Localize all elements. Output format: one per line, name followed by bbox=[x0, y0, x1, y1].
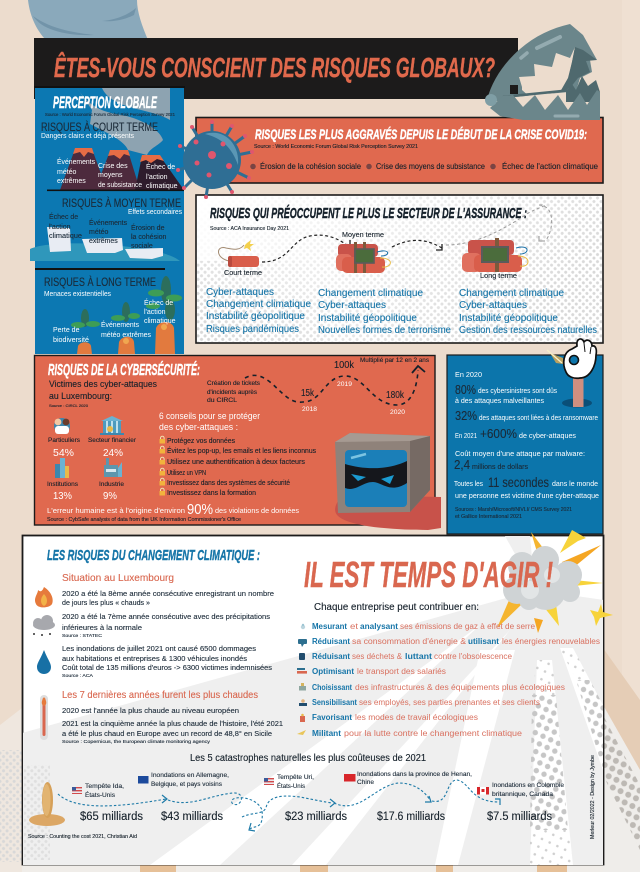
chart labels: 2020 bbox=[390, 410, 406, 416]
chart caption: du CIRCL bbox=[207, 398, 238, 404]
risk: échec action climatique: climatique bbox=[49, 233, 82, 240]
panel: risques de la cybersécurité bbox=[34, 356, 441, 530]
icon: single dynamite bbox=[218, 240, 259, 267]
item: tempête ida: $65 milliards bbox=[80, 811, 143, 823]
list: long terme: Changement climatique bbox=[459, 288, 564, 299]
stat: secteur financier bbox=[88, 437, 137, 459]
stat: secteur financier: Secteur financier bbox=[88, 437, 137, 444]
subheading: 7 dernières années: Les 7 dernières années furent les plus chaudes bbox=[62, 689, 258, 701]
action: réduisant énergie: Réduisant bbox=[312, 637, 350, 646]
icebergs bbox=[30, 227, 180, 261]
tips list: Évitez les pop-up, les emails et les liens inconnus bbox=[167, 446, 316, 455]
bullet list: Érosion de la cohésion sociale bbox=[260, 162, 362, 171]
action: militant: pour la lutte contre le changement climatique bbox=[344, 729, 523, 738]
risk: échec action climatique: Échec de bbox=[49, 212, 78, 221]
heading: en 2020: En 2020 bbox=[455, 370, 482, 379]
item: inondations chine bbox=[344, 771, 472, 823]
action: optimisant bbox=[312, 667, 446, 676]
action: optimisant: Optimisant bbox=[312, 667, 354, 676]
action: militant: Militant bbox=[312, 729, 341, 738]
chart labels: 2019 bbox=[337, 382, 353, 388]
stat: industrie bbox=[99, 481, 124, 502]
stat: industrie: Industrie bbox=[99, 481, 124, 488]
heading: 5 catastrophes: Les 5 catastrophes naturelles les plus coûteuses de 2021 bbox=[190, 753, 426, 764]
stat: +600%: +600% bbox=[480, 426, 517, 441]
icon: virus bbox=[176, 120, 254, 199]
risk: échec action climatique: l'action bbox=[146, 174, 168, 181]
heading: risques du changement climatique: LES RISQUES DU CHANGEMENT CLIMATIQUE : bbox=[47, 547, 260, 564]
icon: industrie bbox=[104, 458, 122, 477]
panel: secteur de l'assurance bbox=[196, 195, 603, 343]
risk: crise des moyens: de subsistance bbox=[98, 182, 142, 189]
list: long terme bbox=[459, 288, 597, 336]
text: année la plus chaude: a été le plus chaud en Europe avec un record de 48,8° en Sicile bbox=[62, 729, 272, 738]
panel: risques aggravés covid bbox=[196, 118, 603, 183]
icon: institutions bbox=[55, 458, 69, 478]
section: moyen terme bbox=[30, 197, 182, 270]
icon: particuliers bbox=[54, 418, 70, 434]
tips list: Investissez dans des systèmes de sécurité bbox=[167, 478, 290, 487]
callout: erreur humaine: L'erreur humaine est à l'origine d'environ bbox=[47, 506, 185, 515]
risk: échec action climatique bbox=[144, 298, 176, 325]
source: Source : CIRCL 2020 bbox=[49, 403, 89, 408]
stat: coût moyen bbox=[454, 451, 585, 472]
label: court terme: Court terme bbox=[224, 268, 262, 277]
text: précipitations: Source : STATEC bbox=[62, 633, 103, 638]
text: inondations: aux habitations et entreprises & 1300 véhicules inondés bbox=[62, 654, 247, 663]
list: moyen terme: Nouvelles formes de terrorisme bbox=[318, 325, 451, 336]
list: long terme: Instabilité géopolitique bbox=[459, 313, 558, 324]
intro text: Chaque entreprise peut contribuer en: bbox=[314, 602, 479, 613]
action: réduisant énergie: utilisant bbox=[468, 637, 499, 646]
tips list: Utilisez une authentification à deux facteurs bbox=[167, 457, 305, 466]
risk: crise des moyens: Crise des bbox=[98, 163, 128, 170]
stat: 11 secondes: dans le monde bbox=[552, 481, 598, 488]
list: long terme: Gestion des ressources naturelles bbox=[459, 325, 597, 336]
tips heading: 6 conseils pour se protéger bbox=[159, 411, 260, 422]
source: Sources : Marsh/Microsoft/NIVLI/ CMS Survey 2021 bbox=[455, 507, 572, 513]
text: inondations: Les inondations de juillet 2021 ont causé 6500 dommages bbox=[62, 644, 256, 653]
risk: érosion cohésion sociale: la cohésion bbox=[131, 234, 167, 241]
illustration: shark tail top left bbox=[28, 0, 148, 40]
action: sensibilisant: Sensibilisant bbox=[312, 698, 357, 707]
source: et Gallice International 2021 bbox=[455, 514, 522, 520]
item: tempête ida bbox=[72, 783, 143, 823]
timeline arrowheads bbox=[162, 795, 500, 831]
bullet list: Crise des moyens de subsistance bbox=[376, 162, 485, 171]
icon: coin on plate bbox=[29, 782, 65, 826]
risk: perte de biodiversité bbox=[53, 327, 89, 344]
item: tempête uri bbox=[264, 774, 347, 823]
text: année la plus chaude: 2020 est l'année la plus chaude au niveau européen bbox=[62, 706, 239, 715]
chart caption: Création de tickets bbox=[207, 381, 260, 387]
item: tempête uri: Tempête Uri, bbox=[277, 774, 314, 781]
label: moyen terme: Moyen terme bbox=[342, 230, 384, 239]
heading: RISQUES À LONG TERME bbox=[44, 276, 156, 289]
stat: 11 secondes bbox=[454, 475, 599, 500]
chart labels: Multiplié par 12 en 2 ans bbox=[360, 358, 429, 364]
risk: échec action climatique: climatique bbox=[144, 318, 176, 325]
stat: institutions: Institutions bbox=[47, 481, 79, 488]
action: réduisant déchets: ses déchets & bbox=[352, 652, 403, 661]
item: tempête uri: États-Unis bbox=[277, 781, 306, 790]
source: Source : ACA Insurance Day 2021 bbox=[210, 226, 289, 232]
text: précipitations: inférieures à la normale bbox=[62, 623, 142, 632]
panel: changement climatique et action bbox=[22, 530, 613, 865]
stat: coût moyen: 2,4 bbox=[454, 458, 470, 472]
list: moyen terme: Changement climatique bbox=[318, 288, 423, 299]
chart caption: d'incidents auprès bbox=[207, 390, 257, 396]
dashed timeline bbox=[58, 780, 499, 829]
item: inondations chine: Chine bbox=[357, 779, 374, 786]
action: réduisant déchets: Réduisant bbox=[312, 652, 350, 661]
section: court terme bbox=[41, 121, 184, 191]
action: mesurant: Mesurant bbox=[312, 622, 347, 631]
text: températures: 2020 a été la 8ème année consécutive enregistrant un nombre bbox=[62, 589, 274, 598]
risk: érosion cohésion sociale: Érosion de bbox=[131, 223, 165, 232]
item: tempête uri: $23 milliards bbox=[285, 811, 347, 823]
risk: perte de biodiversité: Perte de bbox=[53, 327, 80, 334]
risk: échec action climatique: Échec de bbox=[146, 162, 175, 171]
stat: secteur financier: 24% bbox=[103, 447, 123, 459]
text: année la plus chaude bbox=[62, 706, 283, 744]
risk: échec action climatique: Échec de bbox=[144, 298, 173, 307]
subheading: situation au luxembourg: Situation au Luxembourg bbox=[62, 572, 174, 584]
item: tempête ida: Tempête Ida, bbox=[85, 783, 124, 790]
item: inondations canada: Inondations en Colombie bbox=[492, 782, 564, 789]
text: précipitations: 2020 a été la 7ème année consécutive avec des précipitations bbox=[62, 612, 270, 621]
heading: perception globale: PERCEPTION GLOBALE bbox=[53, 93, 157, 112]
chart labels: 100k bbox=[334, 360, 355, 371]
victimes heading: au Luxembourg: bbox=[49, 391, 112, 402]
risk: échec action climatique: climatique bbox=[146, 183, 178, 190]
text: températures bbox=[62, 589, 274, 607]
risk: échec action climatique: l'action bbox=[49, 224, 71, 231]
panel: statistiques cyber 2020 bbox=[22, 339, 613, 865]
chart labels: 15k bbox=[301, 388, 315, 399]
label: long terme: Long terme bbox=[480, 271, 517, 280]
risk: événements météo extrêmes: météo extrêmes bbox=[101, 332, 151, 339]
item: inondations chine: $17.6 milliards bbox=[377, 811, 445, 823]
chart labels: 180k bbox=[386, 390, 405, 401]
list: court terme: Risques pandémiques bbox=[206, 324, 299, 335]
list: moyen terme: Cyber-attaques bbox=[318, 300, 386, 311]
risk: événements météo extrêmes: extrêmes bbox=[57, 178, 86, 185]
victimes heading bbox=[49, 379, 157, 402]
list: moyen terme: Instabilité géopolitique bbox=[318, 313, 417, 324]
risk: érosion cohésion sociale bbox=[131, 223, 167, 250]
stat: institutions: 13% bbox=[53, 490, 72, 502]
item: inondations canada: britannique, Canada bbox=[492, 791, 553, 798]
action: réduisant énergie: les énergies renouvelables bbox=[502, 637, 600, 646]
dashed timeline arrows bbox=[262, 205, 552, 262]
item: tempête ida: États-Unis bbox=[85, 790, 116, 799]
risk: crise des moyens: moyens bbox=[98, 172, 123, 179]
panel: perception globale bbox=[30, 86, 185, 354]
subheading: Dangers clairs et déjà présents bbox=[41, 133, 134, 140]
action: choisissant: des infrastructures & des équipements plus écologiques bbox=[355, 683, 565, 692]
background rays bbox=[22, 536, 604, 865]
text: températures: de jours les plus « chauds » bbox=[62, 598, 150, 607]
stat: 11 secondes: 11 secondes bbox=[488, 475, 549, 490]
source: Source : World Economic Forum Global Risk Perception Survey 2021 bbox=[254, 144, 418, 150]
risk: événements météo extrêmes: Événements bbox=[101, 320, 139, 329]
callout: erreur humaine: 90% bbox=[187, 501, 213, 518]
action icons bbox=[297, 624, 307, 735]
text: année la plus chaude: 2021 est la cinquième année la plus chaude de l'histoire, l'été 2021 bbox=[62, 719, 283, 728]
illustration: ok hand bbox=[547, 339, 596, 408]
carrots bbox=[71, 276, 182, 354]
subheading: Effets secondaires bbox=[128, 209, 182, 216]
stat: particuliers bbox=[48, 437, 81, 459]
action: réduisant énergie bbox=[312, 637, 600, 646]
heading: RISQUES À COURT TERME bbox=[41, 121, 158, 134]
action: favorisant: les modes de travail écologiques bbox=[355, 713, 478, 722]
tips heading bbox=[159, 411, 260, 433]
chart caption bbox=[207, 381, 260, 404]
action: réduisant déchets: contre l'obsolescence bbox=[434, 652, 513, 661]
stat: industrie: 9% bbox=[103, 490, 117, 502]
text: inondations: Coût total de 135 millions d'euros -> 6300 victimes indemnisées bbox=[62, 663, 272, 672]
risk: événements météo extrêmes: météo bbox=[89, 229, 109, 236]
stat: 80%: à des attaques malveillantes bbox=[455, 398, 544, 405]
item: inondations canada bbox=[477, 782, 564, 823]
title banner bbox=[34, 38, 518, 99]
smoke bbox=[77, 88, 170, 155]
tips list bbox=[160, 436, 316, 497]
icon: dynamite bundle large bbox=[462, 238, 528, 272]
list: court terme: Changement climatique bbox=[206, 299, 311, 310]
item: inondations canada: $7.5 milliards bbox=[487, 811, 552, 823]
risk: événements météo extrêmes bbox=[89, 218, 127, 245]
heading: RISQUES À MOYEN TERME bbox=[62, 197, 181, 210]
item: inondations allemagne: Belgique, et pays voisins bbox=[151, 781, 223, 788]
action: choisissant: Choisissant bbox=[312, 683, 352, 692]
risk: événements météo extrêmes bbox=[57, 157, 95, 185]
risk: événements météo extrêmes: météo bbox=[57, 169, 77, 176]
action: optimisant: le transport des salariés bbox=[357, 667, 446, 676]
stat: 32% bbox=[455, 408, 598, 423]
list: long terme: Cyber-attaques bbox=[459, 300, 527, 311]
action: mesurant: ses émissions de gaz à effet de serre bbox=[400, 622, 536, 631]
item: inondations allemagne bbox=[138, 772, 229, 823]
volcanoes bbox=[60, 148, 184, 190]
callout: erreur humaine: des violations de données bbox=[215, 506, 299, 515]
tips list: Investissez dans la formation bbox=[167, 488, 256, 497]
list: court terme bbox=[206, 287, 311, 335]
action: mesurant bbox=[312, 622, 536, 631]
stat: 32%: des attaques sont liées à des ransomware bbox=[479, 415, 598, 422]
risk: échec action climatique bbox=[146, 162, 178, 190]
stat: 80%: des cybersinistres sont dûs bbox=[478, 388, 557, 395]
stat: 11 secondes: Toutes les bbox=[454, 481, 483, 488]
source: Source : World Economic Forum Global Risk Perception Survey 2021 bbox=[45, 112, 175, 117]
stat: coût moyen: Coût moyen d'une attaque par malware: bbox=[455, 451, 585, 458]
source: Source : CybSafe analysis of data from the UK Information Commissioner's Office bbox=[47, 517, 241, 523]
subheading: Menaces existentielles bbox=[44, 291, 111, 298]
stat: particuliers: 54% bbox=[53, 447, 74, 459]
text: année la plus chaude: Source : Copernicus, the European climate monitoring agency bbox=[62, 739, 211, 744]
risk: échec action climatique bbox=[49, 212, 82, 240]
icon: dynamite bundle medium bbox=[336, 242, 390, 273]
tips heading: des cyber-attaques : bbox=[159, 422, 238, 433]
action: réduisant déchets bbox=[312, 652, 513, 661]
action: mesurant: analysant bbox=[360, 622, 398, 631]
tips list: Utilisez un VPN bbox=[167, 468, 206, 477]
icon: thermometer bbox=[40, 695, 48, 740]
icon: secteur financier bbox=[100, 416, 124, 435]
list: court terme: Cyber-attaques bbox=[206, 287, 274, 298]
item: inondations allemagne: $43 milliards bbox=[161, 811, 223, 823]
text: inondations: Source : ACA bbox=[62, 673, 93, 678]
stat: particuliers: Particuliers bbox=[48, 437, 81, 444]
risk: érosion cohésion sociale: sociale bbox=[131, 243, 153, 250]
stat: +600%: En 2021 bbox=[455, 433, 477, 440]
risk: événements météo extrêmes: Événements bbox=[57, 157, 95, 166]
item: inondations chine: Inondations dans la province de Henan, bbox=[357, 771, 472, 778]
stat: 80%: 80% bbox=[455, 382, 476, 397]
risk: échec action climatique: l'action bbox=[144, 309, 166, 316]
stat: 11 secondes: une personne est victime d'une cyber-attaque bbox=[455, 493, 599, 500]
callout: erreur humaine bbox=[47, 501, 299, 518]
risk: perte de biodiversité: biodiversité bbox=[53, 337, 89, 344]
illustration: masked computer monitor bbox=[335, 433, 441, 530]
icon: water drop bbox=[37, 650, 51, 674]
victimes heading: Victimes des cyber-attaques bbox=[49, 379, 157, 390]
risk: événements météo extrêmes: Événements bbox=[89, 218, 127, 227]
action: favorisant bbox=[312, 713, 478, 722]
chart labels bbox=[301, 358, 429, 416]
risk: crise des moyens bbox=[98, 163, 142, 189]
text: précipitations bbox=[62, 612, 270, 638]
text: inondations bbox=[62, 644, 272, 678]
action: sensibilisant: ses employés, ses parties prenantes et ses clients bbox=[359, 698, 540, 707]
action: mesurant: et bbox=[350, 622, 359, 631]
illustration: explosion bbox=[497, 530, 613, 633]
bullet list: Échec de l'action climatique bbox=[502, 162, 599, 171]
risk: événements météo extrêmes bbox=[101, 320, 151, 339]
source: Source : Counting the cost 2021, Christian Aid bbox=[28, 834, 137, 840]
heading: RISQUES DE LA CYBERSÉCURITÉ: bbox=[48, 360, 200, 379]
item: inondations allemagne: Inondations en Allemagne, bbox=[151, 772, 229, 779]
stat: 32%: 32% bbox=[455, 408, 477, 423]
illustration: shark jaw trap bbox=[485, 24, 600, 120]
dashed incident curve bbox=[245, 366, 425, 405]
list: court terme: Instabilité géopolitique bbox=[206, 311, 305, 322]
action: réduisant déchets: luttant bbox=[405, 652, 432, 661]
action: favorisant: Favorisant bbox=[312, 713, 352, 722]
credit: Merleur 02/2022 - Design by Jymbe bbox=[590, 755, 596, 839]
stat: institutions bbox=[47, 481, 79, 502]
stat: 80% bbox=[455, 382, 557, 405]
stat: coût moyen: millions de dollars bbox=[472, 464, 528, 471]
chart labels: 2018 bbox=[302, 407, 318, 413]
bullet list bbox=[250, 162, 599, 171]
risk: événements météo extrêmes: extrêmes bbox=[89, 238, 118, 245]
list: moyen terme bbox=[318, 288, 451, 336]
icon: rain cloud bbox=[33, 615, 55, 636]
stat: +600%: de cyber-attaques bbox=[519, 433, 576, 440]
source bbox=[455, 507, 572, 520]
icon: flame bbox=[35, 587, 53, 607]
action: réduisant énergie: sa consommation d'énergie & bbox=[352, 637, 467, 646]
section: long terme bbox=[44, 276, 182, 354]
stat: +600% bbox=[455, 426, 576, 441]
tips list: Protégez vos données bbox=[167, 436, 235, 445]
